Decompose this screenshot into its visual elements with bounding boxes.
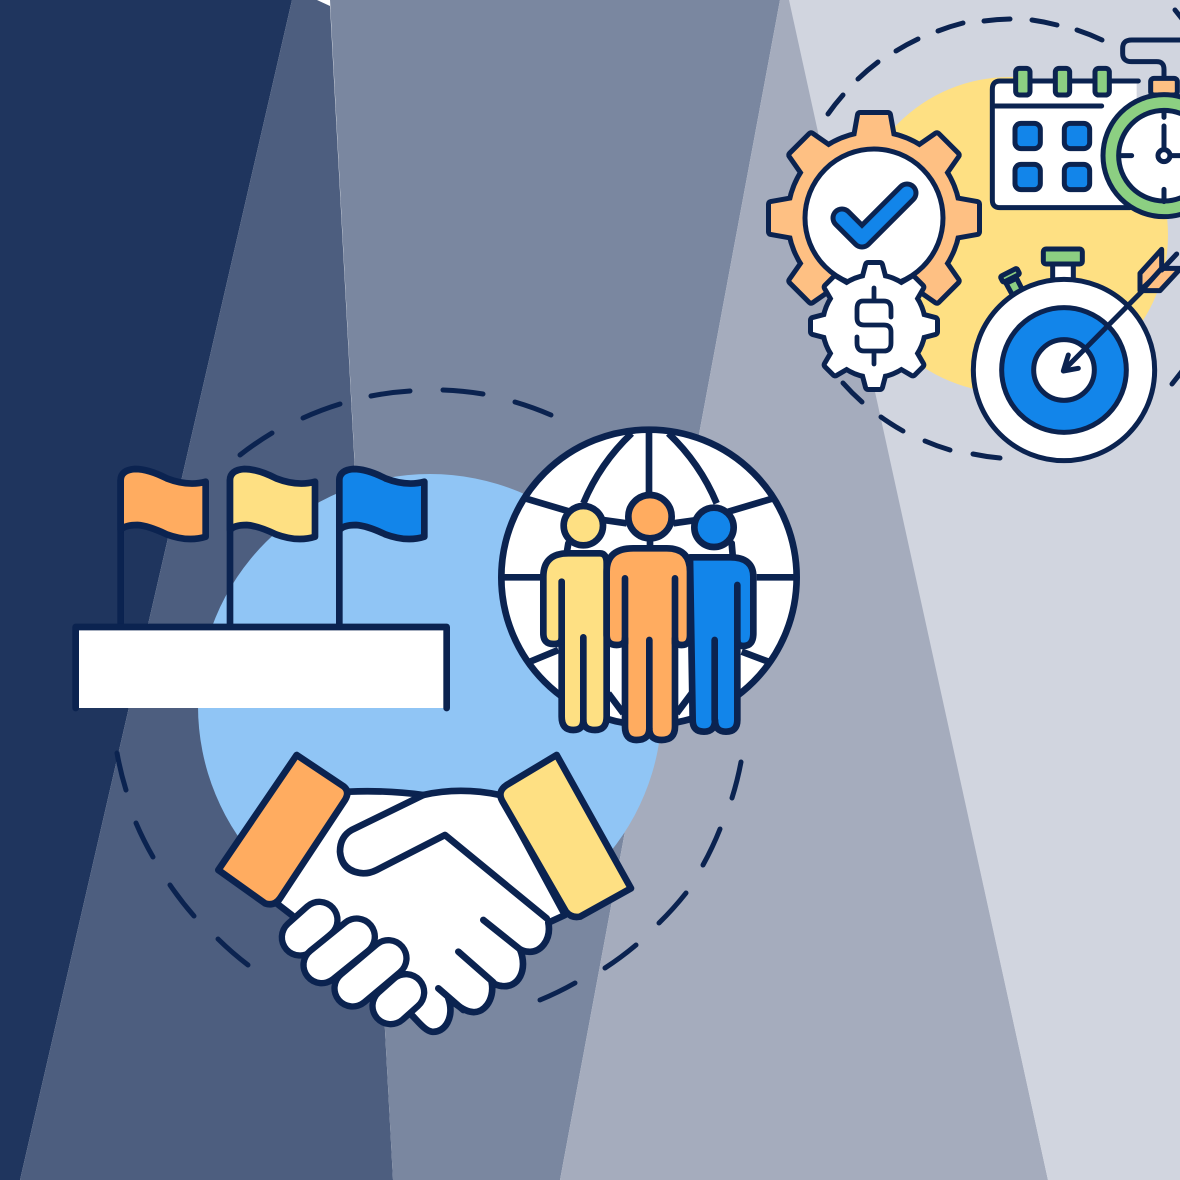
person: orange — [607, 495, 690, 740]
person: blue — [690, 508, 753, 732]
icon: gear with check mark — [771, 115, 977, 321]
yellow backdrop circle — [852, 77, 1168, 393]
icon: handshake — [218, 755, 631, 1032]
icon: globe with team — [501, 430, 797, 740]
blue backdrop circle — [198, 474, 662, 938]
globe — [501, 430, 797, 725]
flag: orange — [121, 469, 206, 627]
fingers — [300, 920, 406, 1006]
hands — [277, 791, 565, 1032]
dashed ring: right — [828, 10, 1180, 458]
person: yellow — [543, 506, 733, 730]
dashed ring: left — [117, 390, 741, 1000]
white block — [76, 627, 447, 708]
icon: target with arrow — [973, 249, 1180, 461]
flag: blue — [339, 469, 424, 627]
cuff: orange — [218, 755, 347, 904]
cuff: yellow — [500, 755, 631, 917]
icon: flags on a white block — [76, 469, 447, 708]
icon: calendar — [992, 68, 1138, 208]
icon: dollar gear — [813, 265, 935, 387]
icon: stopwatch — [1103, 40, 1180, 217]
flag: yellow — [230, 469, 315, 627]
